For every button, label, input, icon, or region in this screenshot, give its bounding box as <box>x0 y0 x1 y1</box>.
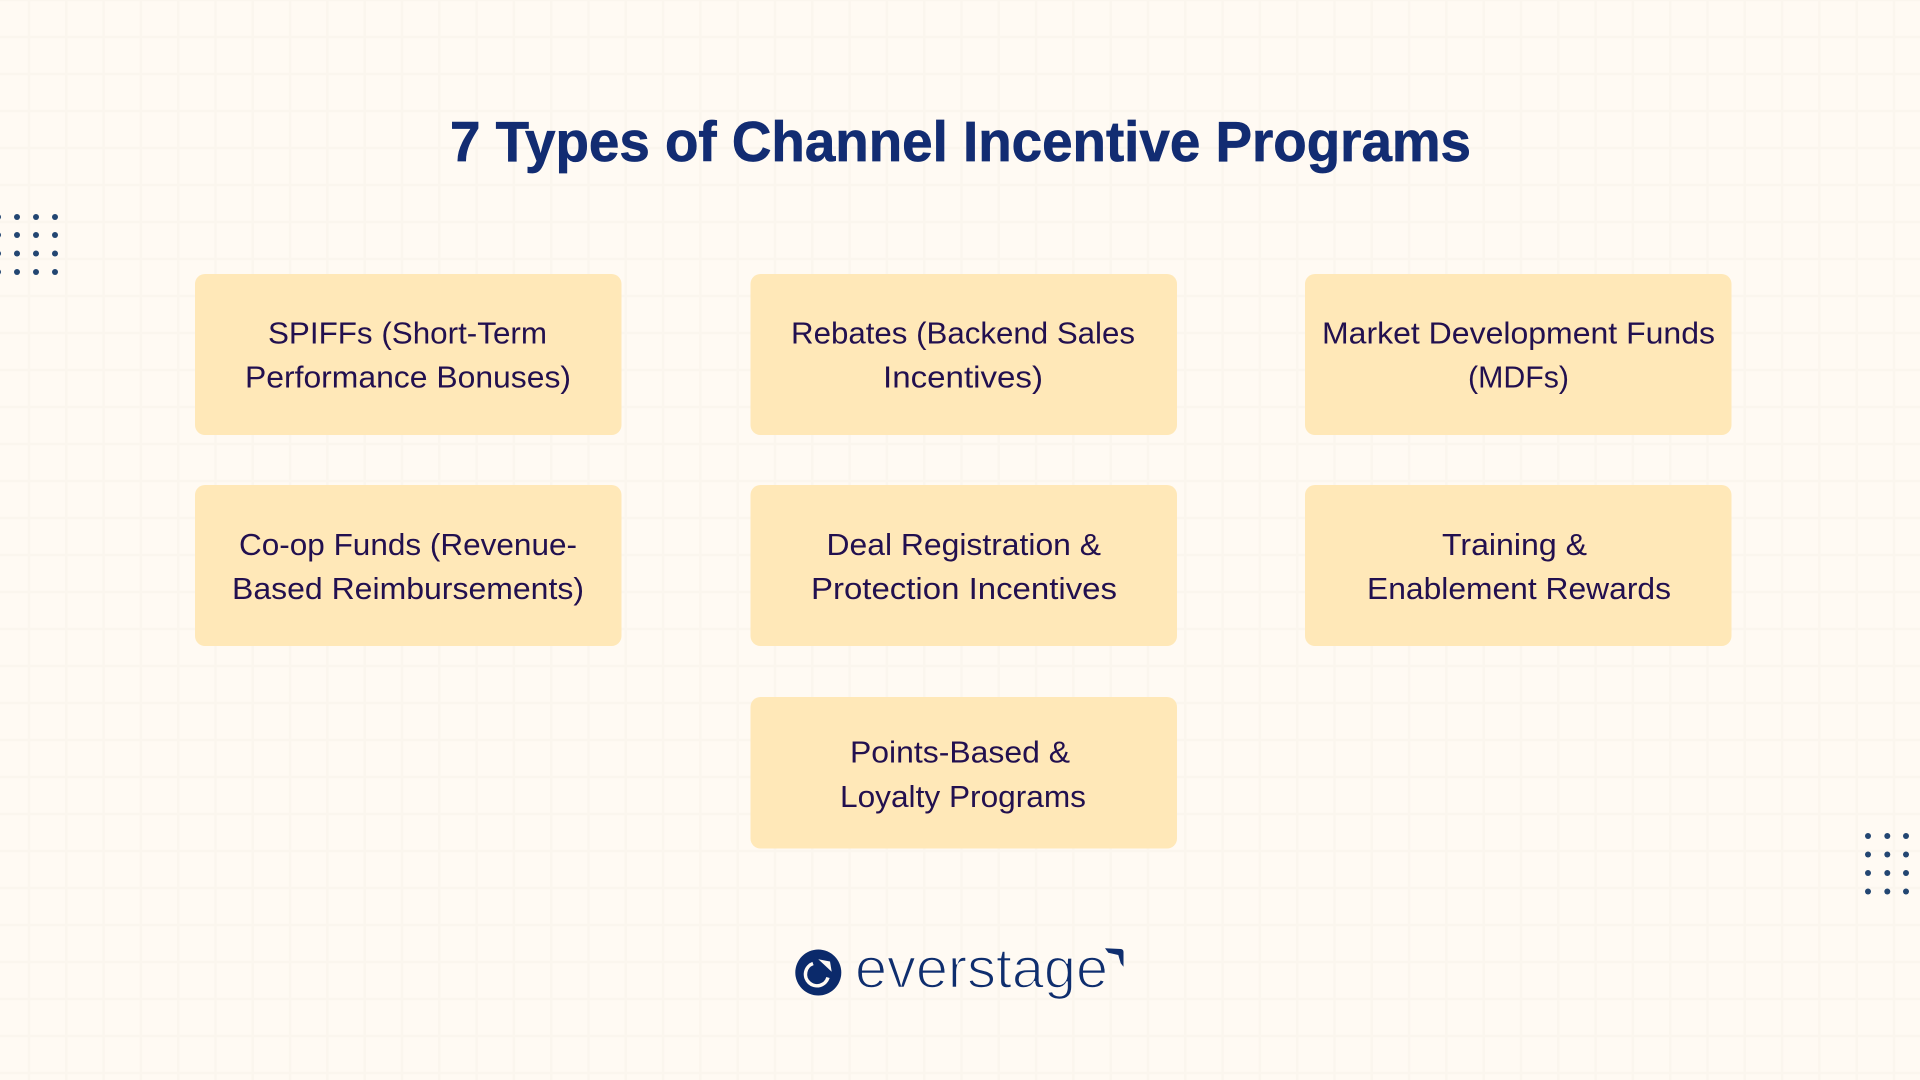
icon: logo mark <box>795 950 841 996</box>
card: Rebates: Incentives) <box>883 360 1043 394</box>
card: Points-Based and Loyalty: Points-Based & <box>850 734 1070 770</box>
card: Deal Registration: Deal Registration & <box>826 527 1101 562</box>
card: Co-op Funds: Based Reimbursements) <box>232 571 584 606</box>
card: Points-Based and Loyalty: Loyalty Programs <box>840 779 1086 814</box>
card: Deal Registration <box>750 485 1177 646</box>
card: Rebates <box>750 274 1177 435</box>
card: Market Development Funds: (MDFs) <box>1468 360 1569 394</box>
icon: logo hook <box>1105 948 1124 967</box>
card: Deal Registration: Protection Incentives <box>811 571 1117 606</box>
logo: everstage <box>795 936 1124 1000</box>
card: SPIFFs: Performance Bonuses) <box>245 360 571 394</box>
card: Co-op Funds <box>195 485 622 646</box>
decorative dots: bottom right <box>1865 833 1909 894</box>
card: SPIFFs: SPIFFs (Short-Term <box>268 316 547 350</box>
card: SPIFFs <box>195 274 622 435</box>
card: Market Development Funds: Market Development Funds <box>1322 316 1715 350</box>
title: 7 Types of Channel Incentive Programs <box>450 110 1471 174</box>
card: Co-op Funds: Co-op Funds (Revenue- <box>239 527 577 562</box>
decorative dots: top left <box>0 214 58 275</box>
card: Rebates: Rebates (Backend Sales <box>791 316 1135 350</box>
card: Training and Enablement: Enablement Rewards <box>1367 571 1671 606</box>
card: Training and Enablement <box>1305 485 1732 646</box>
card: Points-Based and Loyalty <box>750 697 1177 848</box>
card: Market Development Funds <box>1305 274 1732 435</box>
wordmark: everstage <box>855 936 1108 1000</box>
card: Training and Enablement: Training & <box>1442 527 1587 562</box>
